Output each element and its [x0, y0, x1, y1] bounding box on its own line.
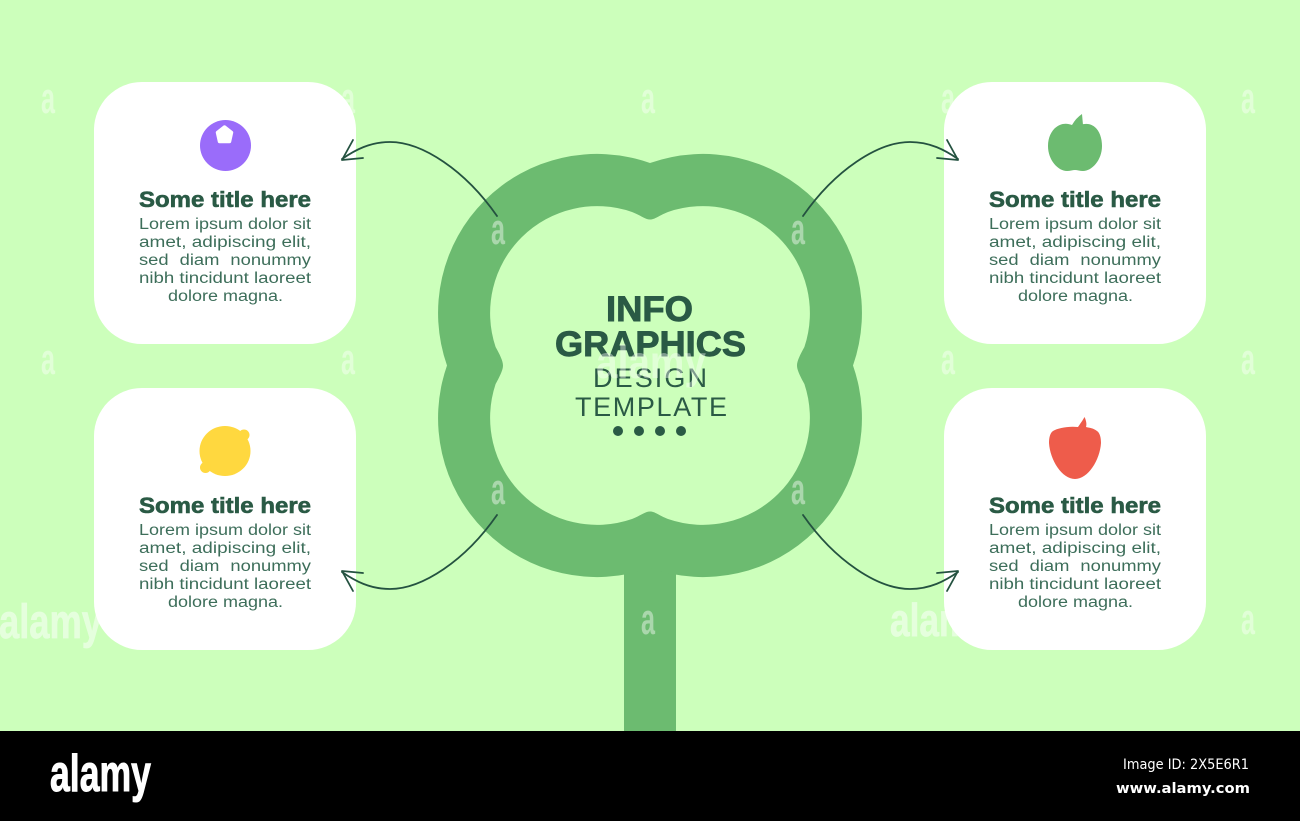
watermarks: a — [1241, 335, 1255, 384]
watermarks: a — [641, 74, 655, 123]
card body text — [989, 522, 1162, 611]
watermarks: a — [641, 595, 655, 644]
icon: purple fruit — [200, 120, 251, 171]
stem — [624, 560, 676, 731]
central title — [555, 290, 746, 436]
flower-shaped ring with stem — [438, 154, 862, 731]
watermarks: a — [491, 205, 505, 254]
watermarks: alamy — [596, 336, 706, 388]
watermarks: alamy — [0, 596, 102, 649]
arrow: bottom right — [803, 515, 958, 591]
card body text: dolore magna. — [1018, 594, 1133, 611]
four dots — [613, 426, 686, 436]
watermarks — [0, 74, 1255, 649]
card body text: amet, adipiscing elit, — [139, 234, 311, 251]
card body text — [989, 216, 1162, 305]
arrow: bottom left — [342, 515, 497, 591]
watermarks: a — [941, 335, 955, 384]
watermarks: a — [41, 74, 55, 123]
card body text: dolore magna. — [168, 288, 283, 305]
watermarks: a — [341, 74, 355, 123]
clover ring — [438, 154, 862, 577]
watermarks: alamy — [890, 594, 990, 646]
watermarks: a — [1241, 74, 1255, 123]
card background — [944, 82, 1206, 344]
card body text — [139, 216, 312, 305]
arrow: top left — [342, 140, 497, 216]
card background — [944, 388, 1206, 650]
watermarks: a — [341, 335, 355, 384]
card: bottom left — [94, 388, 356, 650]
card: top left — [94, 82, 356, 344]
watermarks: a — [941, 74, 955, 123]
card body text: Lorem ipsum dolor sit — [989, 522, 1162, 539]
image id: Image ID: 2X5E6R1 — [1123, 757, 1249, 773]
card body text: sed diam nonummy — [139, 252, 311, 269]
watermarks: a — [1241, 595, 1255, 644]
card body text: Lorem ipsum dolor sit — [139, 522, 312, 539]
icon: yellow lemon — [200, 426, 250, 476]
alamy logo: alamy — [50, 745, 151, 803]
card background — [94, 388, 356, 650]
icon: red apple — [1049, 417, 1101, 479]
card body text: amet, adipiscing elit, — [989, 540, 1161, 557]
card body text: nibh tincidunt laoreet — [139, 576, 312, 593]
footer bar — [0, 731, 1300, 821]
card body text: Lorem ipsum dolor sit — [989, 216, 1162, 233]
watermarks: a — [791, 205, 805, 254]
subheading: design: DESIGN — [593, 363, 707, 393]
card body text: nibh tincidunt laoreet — [989, 576, 1162, 593]
card body text: sed diam nonummy — [989, 252, 1161, 269]
icon: green apple — [1048, 114, 1102, 171]
card: top right — [944, 82, 1206, 344]
card background — [94, 82, 356, 344]
card body text: amet, adipiscing elit, — [989, 234, 1161, 251]
card body text — [139, 522, 312, 611]
watermarks: a — [791, 465, 805, 514]
card body text: amet, adipiscing elit, — [139, 540, 311, 557]
card title: Some title here — [139, 493, 311, 518]
card body text: sed diam nonummy — [139, 558, 311, 575]
card: bottom right — [944, 388, 1206, 650]
watermarks: a — [491, 465, 505, 514]
card body text: nibh tincidunt laoreet — [139, 270, 312, 287]
card title: Some title here — [989, 493, 1161, 518]
card body text: dolore magna. — [1018, 288, 1133, 305]
watermarks: a — [41, 335, 55, 384]
card title: Some title here — [989, 187, 1161, 212]
website: www.alamy.com — [1116, 781, 1250, 797]
heading: graphics: GRAPHICS — [555, 325, 746, 364]
card title: Some title here — [139, 187, 311, 212]
arrow: top right — [803, 140, 958, 216]
card body text: Lorem ipsum dolor sit — [139, 216, 312, 233]
card body text: nibh tincidunt laoreet — [989, 270, 1162, 287]
card body text: sed diam nonummy — [989, 558, 1161, 575]
card body text: dolore magna. — [168, 594, 283, 611]
subheading: template: TEMPLATE — [575, 392, 727, 422]
heading: info: INFO — [606, 290, 693, 329]
